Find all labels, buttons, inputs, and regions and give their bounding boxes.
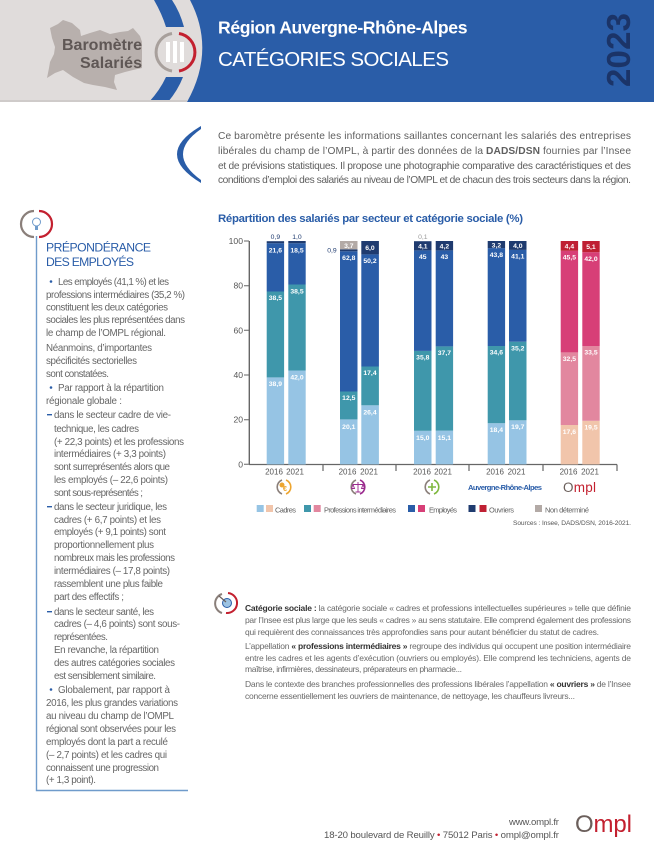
intro text: Ce baromètre présente les informations saillantes concernant les salariés des entreprises [218,131,631,142]
legend: Employés [429,506,457,514]
note text: maîtrise, infirmières, dessinateurs, préparateurs en pharmacie... [245,664,462,674]
subtitle: CATÉGORIES SOCIALES [218,48,449,71]
year labels: 2021 [286,468,304,476]
bars: regional total: 3,2 [492,242,501,250]
bars: regional total: 35,2 [511,346,525,352]
bars: cadre sector: 38,5 [269,295,282,302]
bars: cadre sector: 42,0 [290,374,304,382]
sidebar text: cadres (– 4,6 points) sont sous- [54,619,180,630]
sidebar text: spécificités sectorielles [46,356,137,367]
footer contact: www.ompl.fr [508,817,560,828]
bars: cadre sector [267,234,306,464]
sidebar text: En revanche, la répartition [54,645,159,656]
OMPL logo: Ompl [575,811,632,838]
bars: cadre sector: 38,5 [290,288,304,296]
OMPL logo small: Ompl [563,480,596,495]
year labels: 2021 [360,468,378,476]
bars: health sector: 35,8 [416,354,430,362]
year labels: 2021 [581,468,599,476]
legend [257,505,589,514]
bars: health sector: 15,1 [438,435,451,442]
year: 2023 [600,13,637,87]
map of the region with barometer label [47,20,142,90]
bars: health sector: 37,7 [438,350,451,357]
year labels [265,468,599,476]
icon: cadre sector [277,480,291,494]
bars: OMPL total: 42,0 [584,256,598,263]
sidebar text: employés (+ 9,1 points) sont [54,527,166,538]
sidebar text: sont sous-représentés ; [54,488,143,499]
sidebar text: 2016, les plus grandes variations [46,698,178,709]
sidebar text: sont constatées. [46,369,109,380]
sidebar text: (+ 1,3 point). [46,775,96,786]
bars: regional total [488,241,526,464]
bars: OMPL total [561,241,600,464]
sidebar text: intermédiaires (+ 3,3 points) [54,449,166,460]
bars: cadre sector: 38,9 [269,381,282,388]
bars: regional total: 34,6 [490,350,503,356]
bars: regional total: 19,7 [511,424,525,431]
legend: Cadres [275,506,296,514]
bars: legal sector: 20,1 [342,424,356,431]
year labels: 2016 [339,468,357,476]
sidebar text: régional sont observées pour les [46,724,176,735]
y axis: 0 [238,459,243,469]
sidebar text: (– 2,7 points) et les cadres qui [46,750,167,761]
bars: legal sector: 26,4 [363,410,377,416]
intro text: et de prévisions statistiques. Il propose une photographie comparative des caractéristiques et des [218,161,631,172]
intro text: libérales du champ de l’OMPL, à partir des données de la DADS/DSN fournies par l’Insee [218,146,631,157]
stacked bar chart [229,234,617,495]
legend: Non déterminé [545,506,589,514]
title: Région Auvergne-Rhône-Alpes [218,18,468,38]
sidebar text: part des effectifs ; [54,592,124,603]
sidebar text: sont surreprésentés alors que [54,462,171,473]
note text: Catégorie sociale : la catégorie sociale « cadres et professions intellectuelles supérieures » telle que définie [245,603,631,613]
sidebar text: constituent les deux catégories [46,302,168,314]
bars: OMPL total: 33,5 [584,350,598,356]
sidebar text: est sensiblement similaire. [54,671,156,682]
panel: definition note [215,593,631,701]
year labels: 2016 [265,468,283,476]
legend: Professions intermédiaires [324,506,396,514]
icon: light bulb [21,211,52,237]
sidebar text: Néanmoins, d’importantes [46,343,152,354]
sidebar text: sociales les plus représentées dans [46,315,185,326]
sidebar text: cadres (+ 6,7 points) et les [54,515,161,526]
sidebar text: technique, les cadres [54,424,139,435]
sidebar heading: DES EMPLOYÉS [46,254,134,269]
bars: regional total: 18,4 [490,427,503,434]
footer contact [324,817,560,841]
bars: health sector: 43 [441,254,448,261]
legend: Ouvriers [489,506,514,514]
bars: legal sector [327,241,379,464]
sidebar text: le champ de l’OMPL régional. [46,328,166,339]
intro bracket [177,126,201,183]
y axis: 40 [233,370,243,380]
bars: health sector: 45 [419,254,427,261]
sidebar text: professions intermédiaires (35,2 %) [46,290,185,301]
bars: OMPL total: 5,1 [586,244,596,251]
note text [245,603,631,701]
year labels: 2016 [560,468,578,476]
bars: legal sector: 17,4 [363,370,377,377]
sidebar text: nombreux mais les professions [54,553,175,564]
note text: concerne essentiellement les ouvriers de maintenance, de nettoyage, les chauffeurs livreurs... [245,691,575,701]
bars: OMPL total: 4,4 [565,244,574,250]
bars: OMPL total: 19,5 [584,424,598,432]
bars: health sector: 4,2 [440,244,449,250]
bars: health sector [414,234,453,464]
bars: OMPL total: 17,6 [563,429,576,436]
bars: legal sector: 12,5 [342,395,356,402]
sidebar text: dans le secteur cadre de vie- [54,410,171,421]
icon: barometer ring [156,34,195,71]
map of the region with barometer label: Salariés [80,55,142,72]
sidebar text [46,277,185,786]
regional label: Auvergne-Rhône-Alpes [468,483,542,492]
bars: health sector: 4,1 [418,244,428,250]
icon: health sector [425,480,439,494]
sidebar text: intermédiaires (– 17,8 points) [54,566,170,577]
sources: Sources : Insee, DADS/DSN, 2016-2021. [513,520,631,527]
year labels: 2021 [508,468,526,476]
y axis: 80 [233,281,243,291]
bars: legal sector: 3,7 [344,243,354,250]
note text: Dans le contexte des branches professionnelles des professions libérales l’appellation « ouvriers » de l’Insee [245,679,631,689]
year labels: 2016 [413,468,431,476]
sidebar heading [46,240,151,269]
sidebar text: Les employés (41,1 %) et les [58,277,169,288]
sidebar text: Par rapport à la répartition [58,383,164,394]
footer contact: 18-20 boulevard de Reuilly • 75012 Paris • ompl@ompl.fr [324,830,560,841]
bars: health sector: 0,1 [418,234,428,241]
y axis: 20 [233,415,243,425]
map of the region with barometer label: Baromètre [62,37,142,54]
header banner [0,0,654,102]
bars: legal sector: 50,2 [363,258,377,265]
note text: qui requièrent des connaissances très approfondies sans pour autant bénéficier du statut de cadres. [245,627,599,637]
y axis: 100 [229,236,243,246]
year labels: 2021 [434,468,452,476]
bars: cadre sector: 18,5 [290,248,304,254]
y axis: 60 [233,325,243,335]
intro text [218,131,631,186]
bars: OMPL total: 32,5 [563,356,576,363]
bars: regional total: 4,0 [513,243,523,250]
bars: health sector: 15,0 [416,435,430,442]
bars: legal sector: 6,0 [365,245,375,252]
year labels: 2016 [486,468,504,476]
bars: cadre sector: 0,9 [271,234,280,241]
note text: par l’Insee est plus large que les seuls « cadres » au sens statutaire. Elle comprend également des professions [245,615,631,625]
sidebar heading: PRÉPONDÉRANCE [46,240,151,254]
bars: regional total: 41,1 [511,254,525,260]
note text: entre les cadres et les agents d’exécution (ouvriers ou employés). Elle comprend les techniciens, agents de [245,653,631,663]
sidebar text: Globalement, par rapport à [58,685,171,696]
sidebar text: représentées. [54,632,108,643]
bars: legal sector: 62,8 [342,255,356,262]
bars: legal sector: 0,9 [327,248,337,254]
icon: cadre sector: € [283,484,288,493]
x axis [249,464,617,471]
sidebar text: (+ 22,3 points) et les professions [54,437,184,448]
chart title: Répartition des salariés par secteur et catégorie sociale (%) [218,213,523,225]
sidebar text: employés dont la part a reculé [46,737,169,748]
sidebar text: au niveau du champ de l’OMPL [46,711,175,722]
sidebar text: régionale globale : [46,396,122,407]
bars: cadre sector: 21,6 [269,248,282,254]
sidebar text: proportionnellement plus [54,540,154,551]
sidebar text: rassemblent une plus faible [54,579,164,590]
sidebar text: dans le secteur juridique, les [54,502,167,513]
bars: OMPL total: 45,5 [563,254,576,262]
sidebar text: les employés (– 22,6 points) [54,475,168,486]
sidebar text: des autres catégories sociales [54,658,175,669]
y axis [229,236,249,469]
bars: regional total: 43,8 [490,252,503,259]
note text: L’appellation « professions intermédiaires » regroupe des individus qui occupent une position intermédiaire [245,641,631,651]
icon: legal sector [351,480,365,494]
panel: sidebar [21,211,188,790]
intro text: conditions d’emploi des salariés au niveau de l’OMPL et de chacun des trois secteurs dans la région. [218,175,631,186]
sidebar text: dans le secteur santé, les [54,607,154,618]
bars: cadre sector: 1,0 [292,234,302,241]
icon: target [215,593,237,613]
sidebar text: connaissent une progression [46,763,159,774]
